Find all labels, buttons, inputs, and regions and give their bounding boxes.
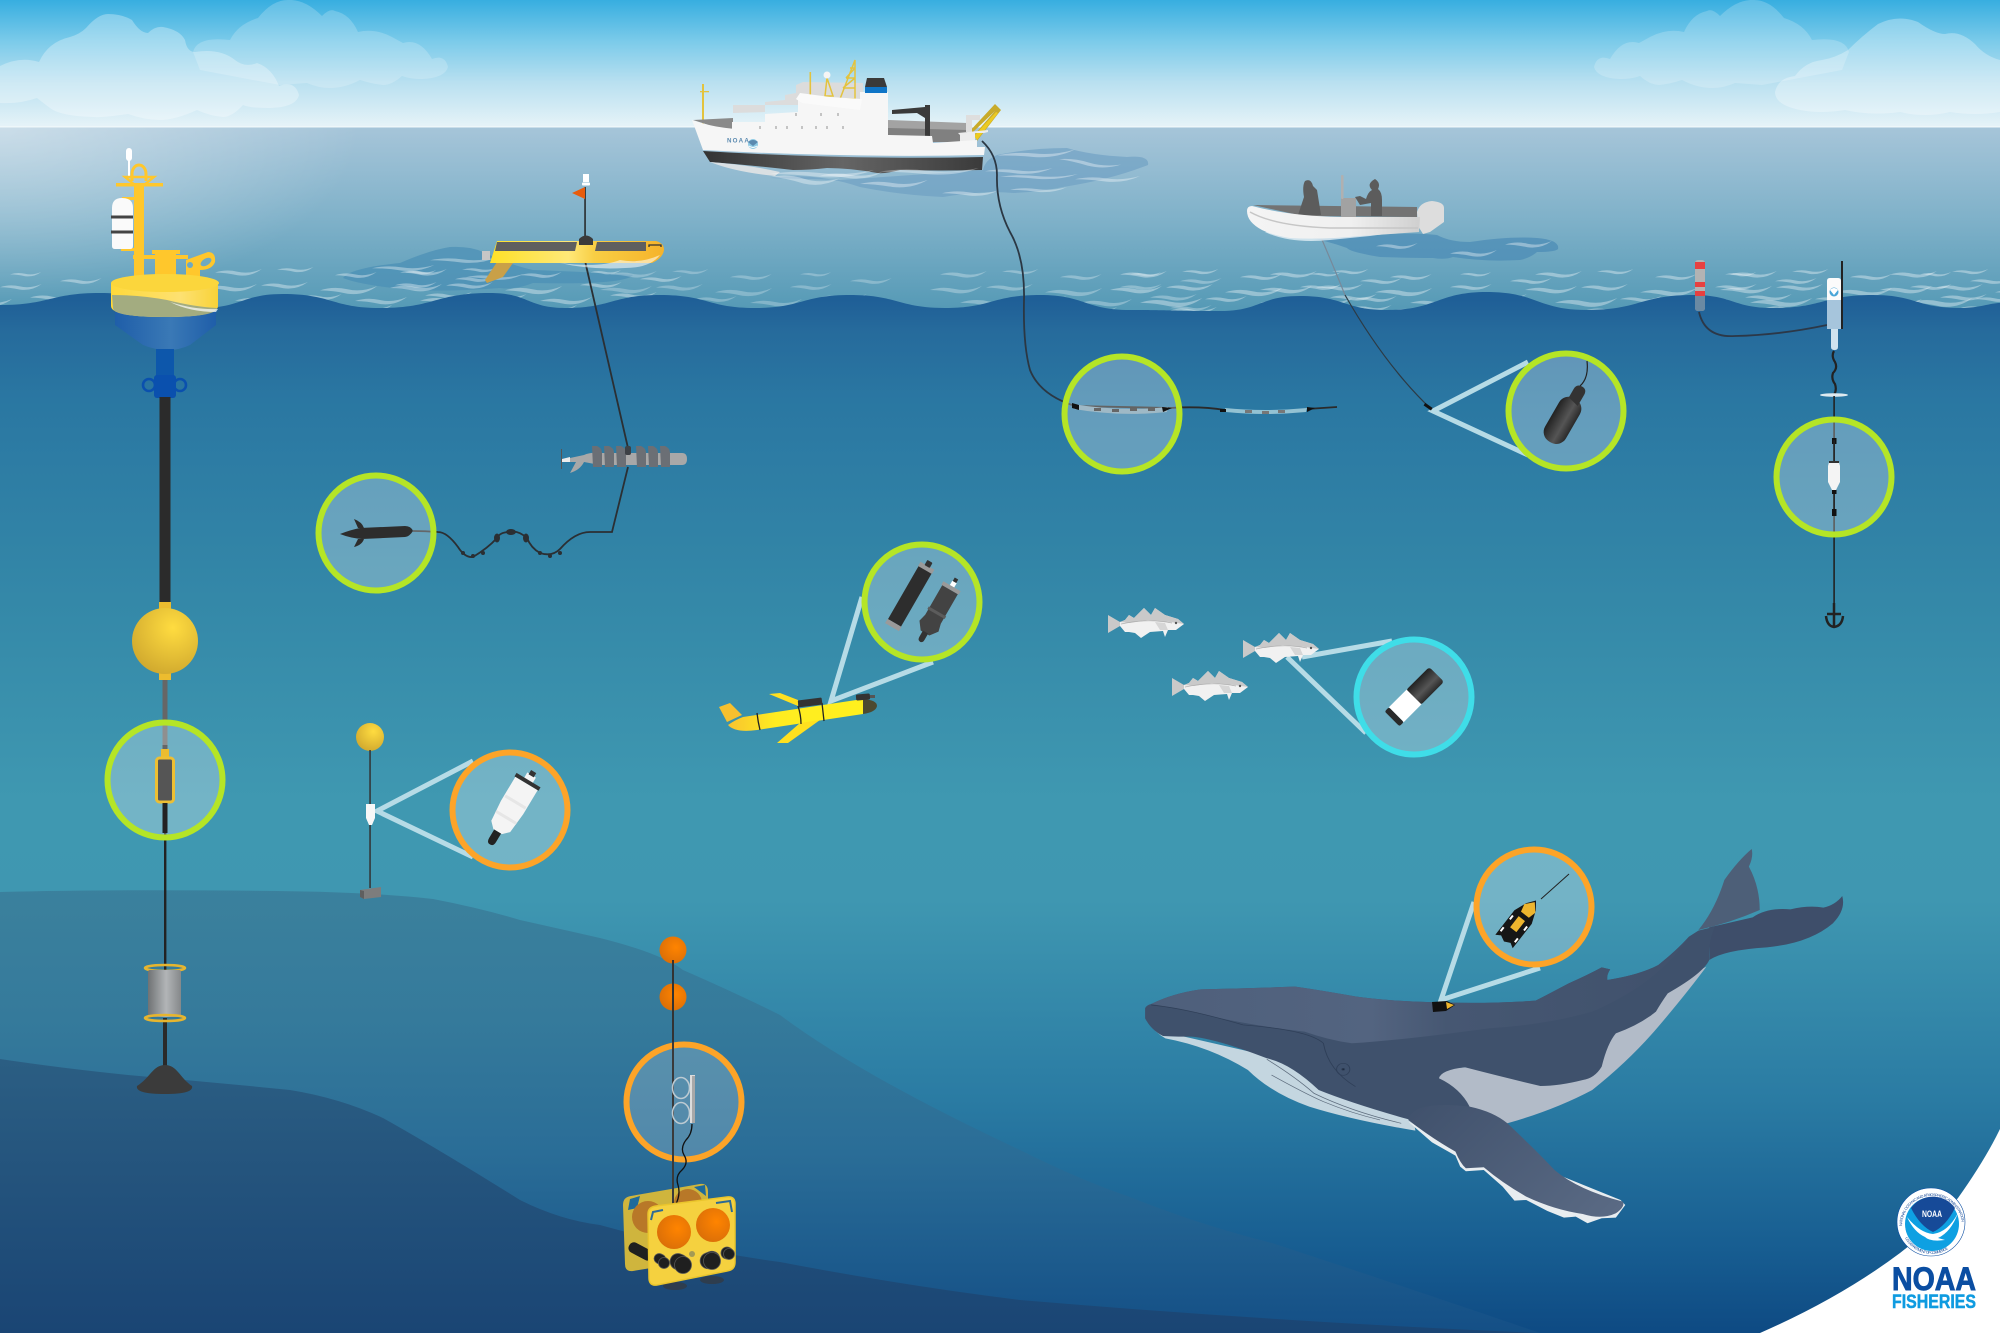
line to anchor: [1833, 396, 1835, 604]
anchor: [1826, 603, 1843, 627]
drogue cable: [1832, 351, 1836, 395]
buoy hull: [111, 274, 219, 350]
magnifier ring: drifter sensor: [1776, 420, 1892, 534]
magnifier ring: fish tag: [1356, 640, 1472, 754]
antenna: [1841, 261, 1843, 329]
bow mast: [700, 84, 709, 124]
aft deck: [888, 120, 967, 142]
wordmark FISHERIES: FISHERIES: [1892, 1291, 1976, 1313]
whale lower jaw: [1147, 1021, 1415, 1131]
corner cutouts: [651, 1201, 732, 1220]
research ship: [692, 60, 1001, 179]
indicator dot: [689, 1251, 695, 1257]
upper wing: [769, 693, 798, 706]
waves at waterline: [770, 168, 979, 179]
ship name: NOAA: [727, 138, 750, 144]
hull reflection: [710, 162, 780, 176]
whale upper fluke: [1698, 849, 1760, 930]
callout lines: [377, 761, 473, 857]
white hull and house: [692, 92, 985, 156]
NOAA Fisheries logo: [1892, 1188, 1976, 1313]
orange spheres: [657, 1208, 730, 1249]
yellow masts and lattice tower: [810, 60, 855, 99]
white corner panel: [1760, 1129, 2000, 1333]
white sensor: [366, 804, 375, 825]
surface ripples: [0, 267, 2000, 315]
rope sensor: [1424, 403, 1433, 411]
white sensor canister: [111, 198, 133, 249]
seafloor: lower slope: [0, 1059, 1540, 1333]
fish two: [1172, 671, 1248, 701]
surface float: [490, 241, 664, 263]
whale body: [1145, 927, 1715, 1119]
aft A-frame: [958, 104, 1001, 147]
inflatable hull: [1247, 206, 1420, 239]
foam: [560, 255, 660, 268]
whale rear fluke: [1709, 896, 1843, 960]
magnifier ring: boat sensor: [1508, 354, 1624, 468]
seal: NOAA: [1922, 1209, 1942, 1220]
whale flipper: [1408, 1105, 1623, 1217]
seal: [1896, 1188, 1966, 1256]
black hull band: [703, 151, 983, 173]
rear superstructure: [733, 82, 863, 113]
tether and towed cable: [413, 263, 628, 557]
fish three: [1243, 633, 1319, 663]
research ship cable: [982, 141, 1075, 406]
grey line to ring: [162, 680, 168, 750]
wake: small boat: [1303, 234, 1558, 261]
ship NOAA emblem: [748, 139, 758, 149]
fish one: [1108, 608, 1184, 638]
blue stem and rings: [143, 349, 186, 398]
clouds: left: [0, 0, 448, 120]
lander feet: [663, 1276, 724, 1290]
funnel: [865, 78, 887, 93]
whale back shading: [1151, 937, 1689, 1043]
bow deck: [693, 118, 733, 131]
anchor dome: [137, 1065, 192, 1094]
whale tag and callout: [1432, 902, 1540, 1012]
magnifier ring: buoy sensor: [108, 722, 222, 838]
ocean glider: [719, 597, 933, 743]
seafloor: upper slope: [0, 890, 1540, 1333]
wake: wave glider: [343, 247, 633, 291]
wordmark NOAA: NOAA: [1892, 1261, 1976, 1297]
mounted sensors: [798, 693, 875, 707]
windows: [759, 113, 844, 129]
CTD rope: [1305, 215, 1430, 408]
boat underside: [1265, 228, 1400, 241]
orange floats: [660, 936, 686, 964]
rear cap: [482, 251, 490, 260]
magnifier ring: glider sensors: [864, 544, 980, 660]
yellow subsurface float: [132, 602, 198, 680]
callout lines: [1287, 641, 1392, 733]
lander line: [672, 960, 674, 1205]
callout lines: [831, 597, 933, 701]
magnifier ring: towed body: [318, 476, 434, 590]
spool: [145, 965, 185, 1021]
yellow float: [356, 723, 384, 751]
bridge deck: [796, 93, 862, 110]
whale creases and eye: [1151, 1005, 1401, 1123]
front frame: [648, 1197, 735, 1285]
crane: [892, 105, 930, 136]
outboard engine: [1417, 201, 1444, 234]
lower mooring line: [162, 803, 168, 1068]
seal: NATIONAL OCEANIC AND ATMOSPHERIC ADMINISTRATION: [1899, 1193, 1964, 1226]
boat and rope: [1247, 175, 1528, 455]
body joints: [757, 703, 824, 730]
person two: [1355, 179, 1382, 216]
rear tail fin: [719, 703, 742, 722]
drifter body: [1827, 278, 1841, 350]
person one: [1298, 180, 1321, 215]
long sensor: [885, 557, 937, 631]
mid-water sub unit: [561, 446, 687, 473]
ocean water body: [0, 292, 2000, 1333]
ripples in boat and glider wake: [372, 241, 1552, 280]
cable beads: [461, 529, 562, 558]
keel fin: [485, 262, 513, 283]
streamer cable and sensors: [1075, 406, 1337, 414]
bottom-moored sensor with callout: [356, 723, 473, 899]
red striped float: [1695, 260, 1705, 311]
whale belly: [1413, 967, 1706, 1123]
fish school: [1108, 608, 1392, 733]
inner deck: [1253, 205, 1417, 217]
callout lines: [1433, 362, 1528, 455]
clouds: right: [1594, 0, 2000, 115]
console: [1341, 175, 1356, 217]
lower wing: [777, 720, 820, 743]
nose handle: [649, 245, 661, 247]
drogue disk: [1820, 393, 1848, 397]
sea surface seen from above: [0, 126, 2000, 317]
seal: U.S. DEPARTMENT OF COMMERCE: [1906, 1236, 1948, 1254]
magnifier ring: bottle sensor: [452, 752, 568, 868]
buoy mast and instruments: [116, 148, 215, 282]
camera cylinders: [652, 1245, 735, 1274]
mooring buoy: [111, 148, 219, 1094]
connecting cable: [1699, 312, 1827, 336]
nose cone: [863, 699, 877, 714]
glider body: [728, 699, 863, 731]
mast and flag: [572, 174, 593, 245]
bottom lander: [623, 846, 1976, 1313]
magnifier ring: ship streamer: [1064, 356, 1180, 472]
wake: research ship: [770, 148, 1148, 197]
solar panels: [495, 242, 646, 251]
magnifier ring: lander hydrophone: [626, 1042, 742, 1206]
second float: [660, 984, 686, 1010]
magnifier ring: whale tag: [1476, 850, 1592, 964]
background: sky: [0, 0, 2000, 127]
concrete weight: [360, 887, 381, 899]
humpback whale: [1145, 849, 1843, 1223]
surface drifter and tethered float: [1695, 260, 1848, 627]
rear frame: [623, 1184, 708, 1271]
mooring line: [369, 750, 371, 888]
wave glider with towed sensors: [413, 174, 687, 558]
whale flipper edge: [1408, 1122, 1625, 1223]
bottle sensor: [910, 573, 966, 647]
black mooring pole: [160, 397, 170, 603]
